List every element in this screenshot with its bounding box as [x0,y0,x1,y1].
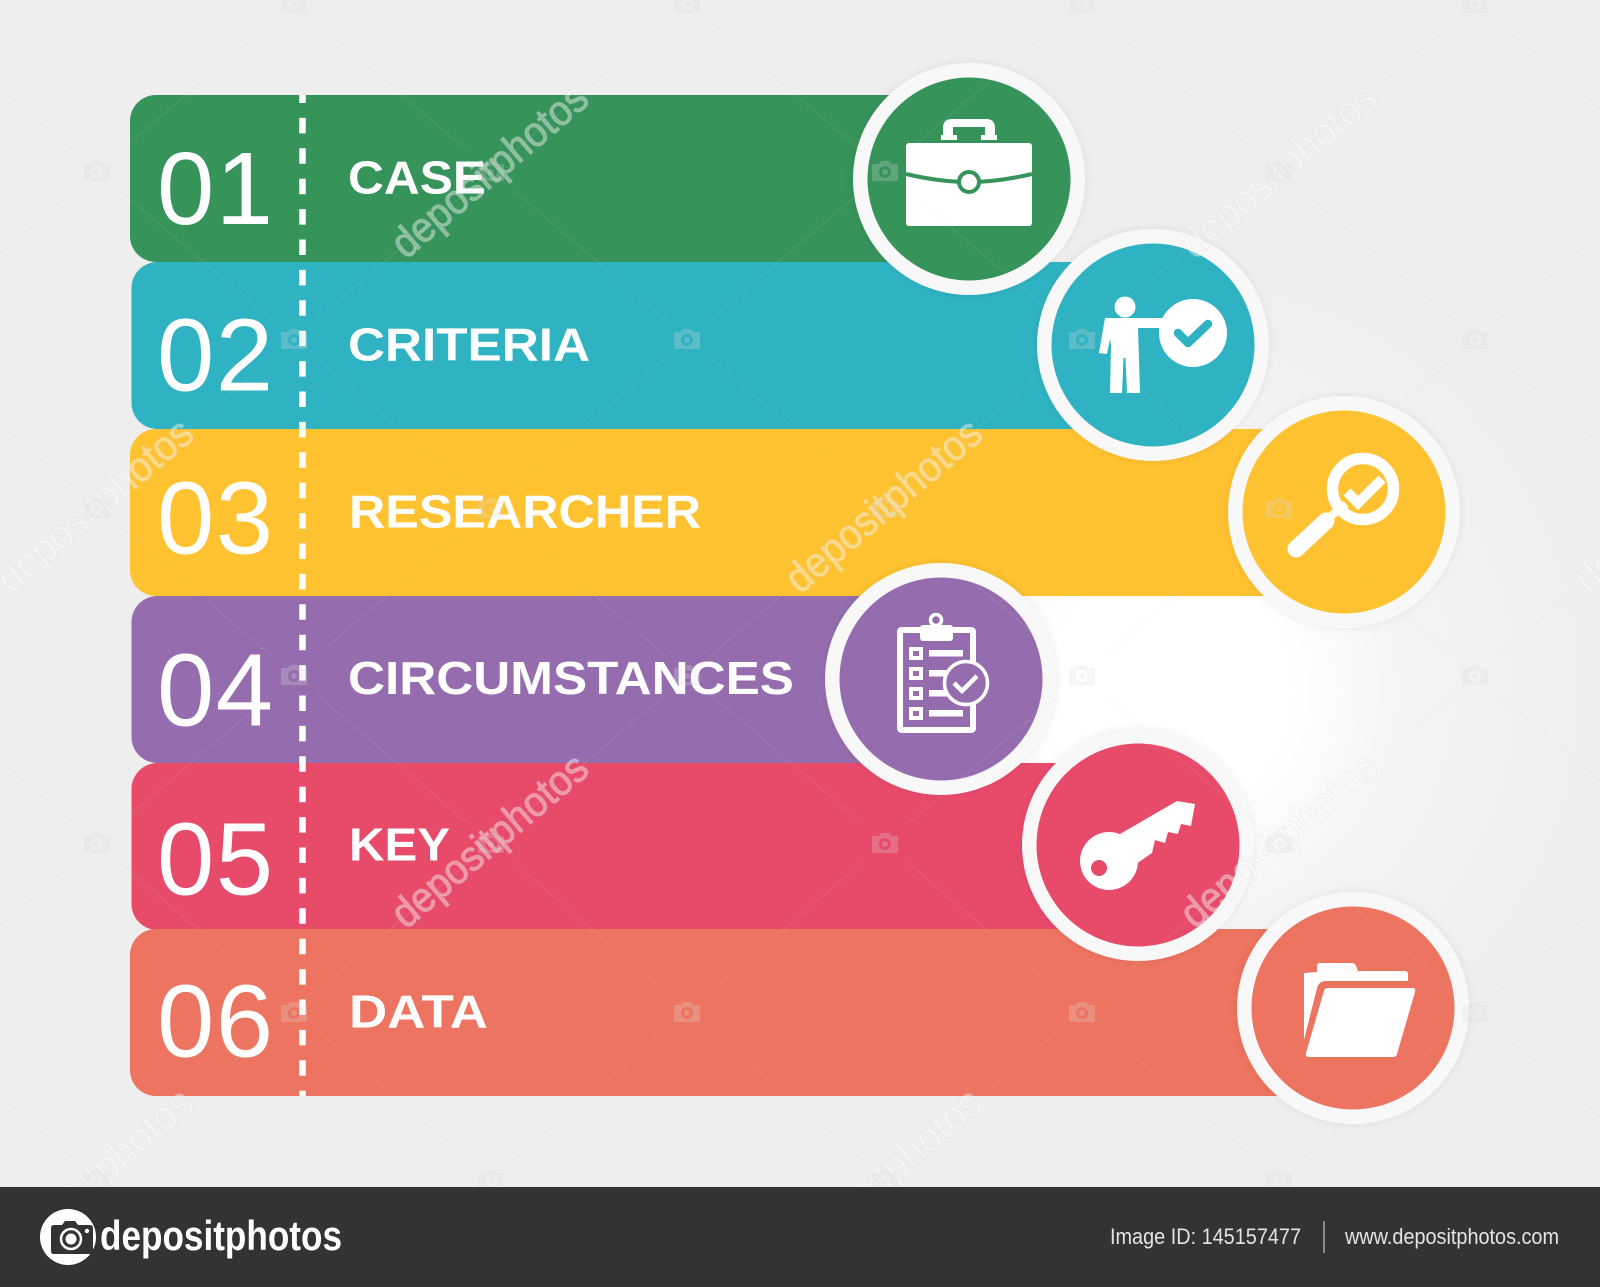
badge 4: clipboard [825,563,1057,795]
icon: person presenting check [1099,296,1227,393]
bar 04: circumstances [132,596,942,763]
numbers [157,131,275,1078]
label: circumstances: CIRCUMSTANCES [348,652,794,704]
label: key: KEY [349,818,450,870]
label: researcher: RESEARCHER [349,486,701,538]
bar 01: case [130,95,970,262]
website url: www.depositphotos.com [1344,1224,1559,1249]
badge 6: folder [1237,892,1469,1124]
bar 06: data [130,929,1353,1096]
icon: briefcase [906,119,1032,226]
watermarks: depositphotos [1170,74,1386,267]
badge 3: magnifier [1228,396,1460,628]
watermarks: depositphotos [775,1079,991,1272]
number 02: 02 [157,298,275,412]
bar 03: researcher [130,429,1344,596]
label: criteria: CRITERIA [348,318,590,370]
watermarks: depositphotos [775,409,991,602]
icon: folder [1304,963,1415,1057]
footer logo icon [40,1209,96,1265]
number 06: 06 [157,964,275,1078]
badge 5: key [1022,729,1254,961]
number 05: 05 [157,802,275,916]
badge 1: briefcase [853,63,1085,295]
icon: magnifier with check [1296,458,1394,549]
bar 05: key [132,763,1138,930]
number 01: 01 [157,131,275,246]
footer separator [1323,1221,1325,1253]
footer bar [0,1187,1600,1287]
watermarks: depositphotos [381,744,597,937]
watermarks: depositphotos [1170,744,1386,937]
icon: clipboard checklist [900,614,988,730]
label: data: DATA [349,986,488,1038]
icon: key [1080,801,1195,890]
image id: Image ID: 145157477 [1110,1224,1301,1249]
footer logo wordmark: depositphotos [100,1212,342,1259]
labels [348,152,794,1038]
number 03: 03 [157,460,275,576]
watermarks: depositphotos [381,74,597,267]
badge 2: person with check [1037,229,1269,461]
bar 02: criteria [132,262,1154,429]
number 04: 04 [157,632,275,748]
label: case: CASE [348,152,486,204]
dashed divider line [299,95,306,1096]
